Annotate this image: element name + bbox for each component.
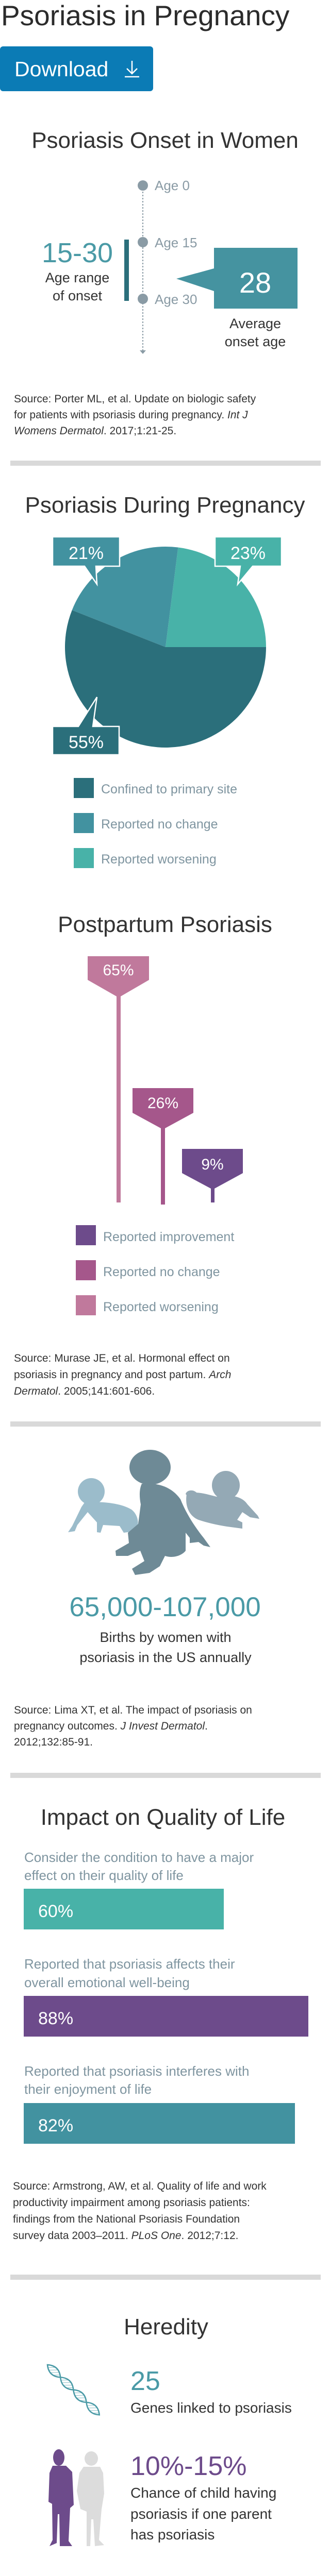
marker 26% (133, 1088, 193, 1205)
heading: during pregnancy: Psoriasis During Pregnancy (25, 493, 305, 518)
bar: 82% (24, 2063, 295, 2144)
marker 65% (88, 956, 149, 1202)
marker 9% (182, 1149, 243, 1202)
callout 23%: 23% (230, 544, 266, 563)
stat: one parent: has psoriasis (130, 2527, 214, 2543)
stat: one parent (130, 2451, 276, 2543)
right lying baby (186, 1471, 259, 1529)
stat: births (69, 1592, 261, 1665)
callout: average onset age (176, 248, 298, 349)
callout 21%: 21% (69, 544, 104, 563)
bar: 60% (24, 1850, 254, 1929)
callout: average onset age: 28 (239, 266, 271, 299)
bar: 88%: overall emotional well-being (24, 1975, 190, 1990)
bar: 88% (24, 1956, 308, 2037)
legend: pregnancy: Confined to primary site (101, 782, 237, 796)
marker 26%: 26% (147, 1095, 178, 1112)
callout: average onset age: onset age (225, 334, 286, 349)
legend: postpartum (76, 1225, 234, 1315)
center sitting baby (116, 1450, 210, 1575)
heading: onset in women: Psoriasis Onset in Women (31, 128, 299, 153)
age range stat: 15-30 (42, 238, 113, 268)
stat: genes: Genes linked to psoriasis (130, 2400, 292, 2416)
legend: postpartum: Reported improvement (103, 1230, 234, 1244)
bar: 60%: effect on their quality of life (24, 1868, 184, 1883)
stat: births: psoriasis in the US annually (79, 1650, 252, 1665)
age range stat: of onset (53, 288, 103, 303)
range bar (124, 240, 129, 301)
heading: heredity: Heredity (124, 2314, 208, 2340)
timeline: Age 15 (155, 235, 197, 250)
pie chart (53, 537, 282, 755)
callout 21% (53, 537, 120, 584)
source 4: productivity impairment among psoriasis patients: (13, 2197, 250, 2209)
source 1: Source: Porter ML, et al. Update on biologic safety (14, 393, 256, 405)
heading: postpartum: Postpartum Psoriasis (58, 912, 272, 937)
download button: Download (14, 57, 108, 81)
legend: pregnancy (74, 778, 237, 868)
marker 65%: 65% (103, 962, 134, 979)
lollipop chart (88, 956, 243, 1205)
stat: births: 65,000-107,000 (69, 1592, 261, 1622)
source 2: psoriasis in pregnancy and post partum. Arch (14, 1369, 231, 1381)
icon: babies (68, 1450, 259, 1575)
legend: postpartum: Reported no change (103, 1265, 220, 1279)
timeline (138, 178, 197, 354)
timeline: Age 0 (155, 178, 190, 193)
source 4: survey data 2003–2011. PLoS One. 2012;7:12. (13, 2230, 238, 2242)
legend: postpartum: Reported worsening (103, 1300, 219, 1314)
marker 9%: 9% (201, 1156, 224, 1173)
callout 23% (215, 537, 282, 584)
source 1: for patients with psoriasis during pregnancy. Int J (14, 409, 248, 421)
source 1: Womens Dermatol. 2017;1:21-25. (14, 425, 176, 437)
source 3: Source: Lima XT, et al. The impact of psoriasis on (14, 1704, 252, 1716)
stat: genes (130, 2366, 292, 2416)
bar: 88%: 88% (38, 2009, 73, 2028)
source 2: Dermatol. 2005;141:601-606. (14, 1385, 155, 1397)
icon: one parent (48, 2449, 104, 2546)
bar: 82%: 82% (38, 2116, 73, 2136)
stat: one parent: 10%-15% (130, 2451, 246, 2481)
source 2: Source: Murase JE, et al. Hormonal effect on (14, 1352, 230, 1364)
left crawling baby (68, 1478, 138, 1533)
stat: births: Births by women with (100, 1630, 232, 1645)
age range stat: Age range (45, 270, 109, 285)
download button (0, 46, 153, 91)
age range stat (42, 238, 113, 303)
bar: 82%: Reported that psoriasis interferes with (24, 2063, 249, 2079)
legend: pregnancy: Reported no change (101, 817, 218, 832)
bar: 88%: Reported that psoriasis affects their (24, 1956, 235, 1972)
icon: DNA (45, 2362, 102, 2418)
title: Psoriasis in Pregnancy (1, 0, 290, 31)
legend: pregnancy: Reported worsening (101, 852, 217, 867)
timeline: Age 30 (155, 292, 197, 307)
bar: 82%: their enjoyment of life (24, 2081, 152, 2097)
stat: one parent: psoriasis if one parent (130, 2506, 272, 2522)
source 3: pregnancy outcomes. J Invest Dermatol. (14, 1720, 208, 1732)
callout: average onset age: Average (229, 316, 281, 331)
source 4: findings from the National Psoriasis Foundation (13, 2213, 240, 2225)
bar: 60%: 60% (38, 1902, 73, 1921)
source 4: Source: Armstrong, AW, et al. Quality of life and work (13, 2180, 267, 2192)
bar: 60%: Consider the condition to have a major (24, 1850, 254, 1865)
callout 55%: 55% (69, 733, 104, 752)
stat: one parent: Chance of child having (130, 2485, 276, 2501)
source 3: 2012;132:85-91. (14, 1736, 93, 1748)
stat: genes: 25 (130, 2366, 160, 2396)
heading: quality of life: Impact on Quality of Life (41, 1805, 285, 1830)
callout 55% (53, 697, 119, 755)
